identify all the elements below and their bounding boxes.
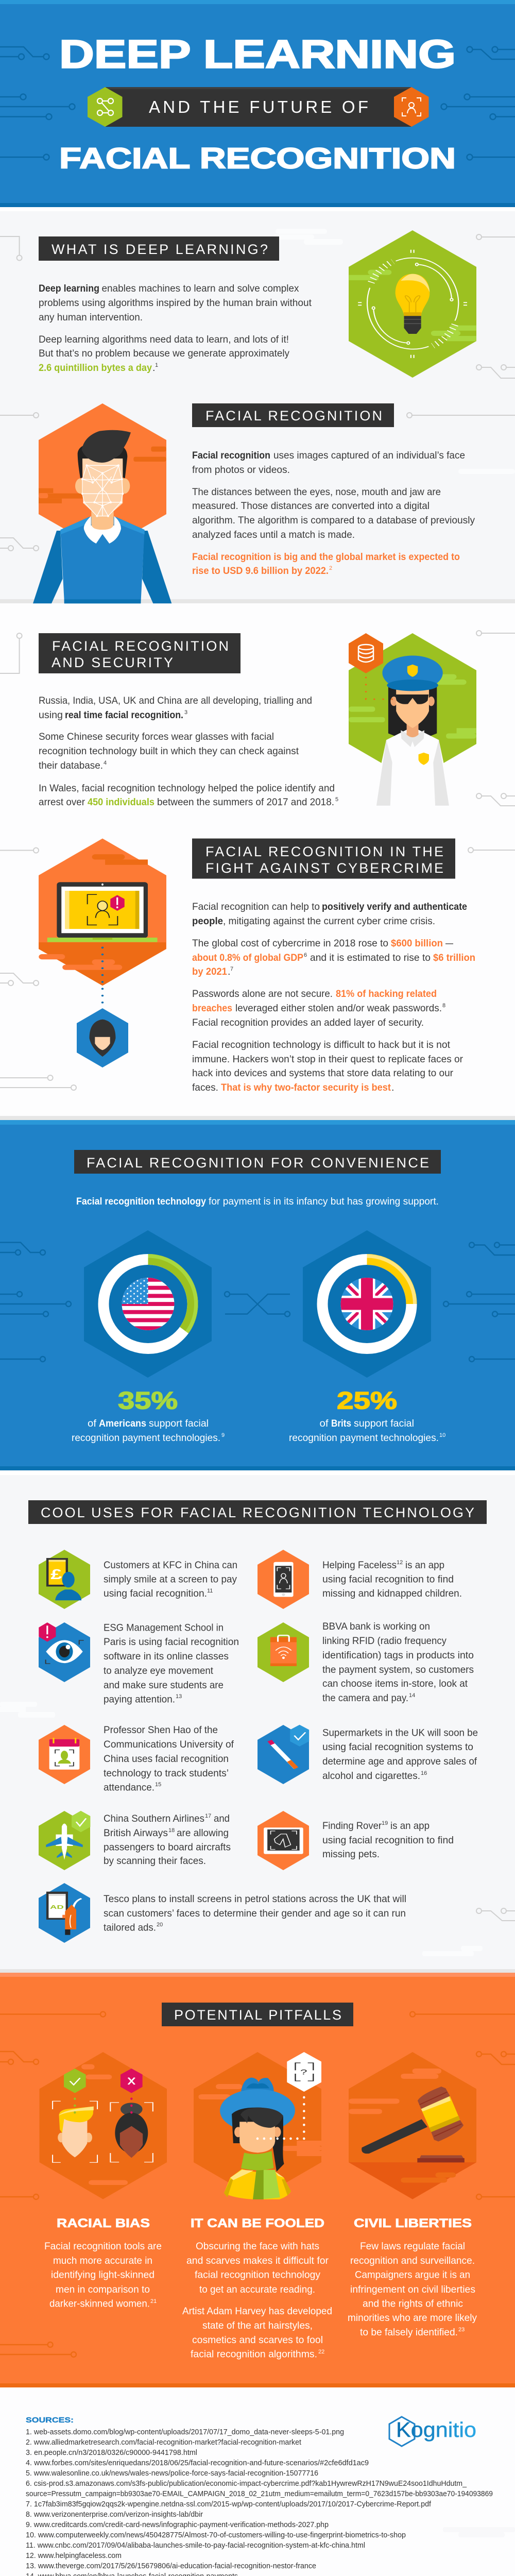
text block: security: arrest over	[39, 796, 85, 808]
sources list: 3. en.people.cn/n3/2018/0326/c90000-9441798.html	[26, 2449, 197, 2457]
text block: cybercrime: leveraged either stolen and/or weak passwords.	[235, 1003, 442, 1014]
sources list: 13. www.theverge.com/2017/5/26/15679806/ai-education-facial-recognition-nestor-france	[26, 2562, 316, 2570]
column: racial bias: much more accurate in	[53, 2255, 152, 2266]
section heading: convenience: FACIAL RECOGNITION FOR CONVENIENCE	[87, 1155, 429, 1171]
stat: 25%: 25%	[337, 1386, 397, 1414]
use: Professor Shen Hao	[39, 1724, 234, 1793]
column: racial bias: identifying light-skinned	[51, 2269, 154, 2281]
use: Supermarkets: using facial recognition systems to	[322, 1741, 473, 1753]
section heading: Facial recognition and security	[39, 633, 241, 673]
text block: what is deep learning: problems using algorithms inspired by the human brain without	[39, 297, 312, 309]
use: Finding Rover	[258, 1811, 454, 1870]
stat: 35%: Americans	[99, 1418, 146, 1429]
use: Airlines: are allowing	[177, 1827, 229, 1839]
use: Airlines: passengers to board aircrafts	[104, 1841, 231, 1853]
sources heading: SOURCES:	[26, 2416, 74, 2425]
text block: facial recognition: measured. Those distances are converted into a digital	[192, 500, 430, 512]
text block: cybercrime: The global cost of cybercrime in 2018 rose to	[192, 938, 388, 949]
intro text: for payment is in its infancy but has growing support.	[209, 1196, 439, 1207]
column: civil liberties: 23	[458, 2327, 465, 2333]
text block: facial recognition: algorithm. The algorithm is compared to a database of previously	[192, 515, 475, 526]
use: BBVA	[258, 1621, 474, 1704]
use: Professor Shen Hao: Communications University of	[104, 1739, 234, 1750]
text block: cybercrime: about 0.8% of global GDP	[192, 952, 303, 963]
column: civil liberties: infringement on civil liberties	[350, 2284, 475, 2295]
text block: cybercrime: by 2021	[192, 966, 227, 977]
sources list: 7. 1c7fab3im83f5gqiow2qqs2k-wpengine.netdna-ssl.com/2015-wp/wp-content/uploads/2017/10/2017-Cybercrime-Report.pdf	[26, 2500, 432, 2509]
stat: 25%: Brits	[331, 1418, 351, 1429]
text block: security	[39, 695, 338, 808]
panel: potential pitfalls	[0, 1969, 515, 2576]
icon: cross hexagon	[121, 2069, 143, 2093]
section heading: Facial recognition	[192, 403, 394, 427]
section heading: cybercrime	[192, 839, 455, 879]
text block: security: between the summers of 2017 and 2018.	[157, 796, 334, 808]
sources list: 2. www.alliedmarketresearch.com/facial-recognition-market?facial-recognition-market	[26, 2438, 301, 2447]
section 2 background	[0, 599, 515, 1116]
text block: cybercrime: —	[445, 938, 453, 949]
illustration: police officer with database	[349, 633, 476, 806]
section heading: cool uses	[28, 1500, 487, 1524]
sources list: 12. www.helpingfaceless.com	[26, 2552, 122, 2560]
use: Airlines: and	[214, 1813, 230, 1824]
text block: cybercrime: and it is estimated to rise to	[310, 952, 431, 963]
column: civil liberties: Campaigners argue it is an	[355, 2269, 470, 2281]
stat: 35%: support facial	[149, 1418, 209, 1429]
use: Supermarkets	[258, 1725, 478, 1784]
column: civil liberties: to be falsely identified.	[360, 2327, 458, 2338]
use: BBVA: identification) tags in products into	[322, 1650, 474, 1661]
text block: cybercrime: $600 billion	[391, 938, 443, 949]
illustration: racial bias	[39, 2052, 167, 2199]
use: Professor Shen Hao: China uses facial recognition	[104, 1753, 229, 1765]
use: Finding Rover: using facial recognition to find	[322, 1835, 454, 1846]
use: ESG school: paying attention.	[104, 1694, 175, 1705]
icon: alert hexagon	[110, 895, 125, 911]
title line: Deep Learning: DEEP LEARNING	[59, 32, 456, 76]
illustration: man with face mesh	[33, 403, 171, 603]
use: Tesco: 20	[157, 1922, 163, 1928]
text block: cybercrime: 7	[230, 966, 233, 972]
column: it can be fooled: facial recognition technology	[195, 2269, 320, 2281]
panel: sources	[26, 2416, 493, 2576]
use: ESG school: Paris is using facial recognition	[104, 1636, 239, 1648]
panel: convenience	[0, 1116, 515, 1475]
sources list: 8. www.verizonenterprise.com/verizon-insights-lab/dbir	[26, 2511, 203, 2519]
sources list: 4. www.forbes.com/sites/enriquedans/2018/06/25/facial-recognition-and-future-scenarios/#2cfe6dfd1ac9	[26, 2459, 369, 2467]
stat: 25%: of	[319, 1418, 329, 1429]
illustration: light bulb in green hexagon	[349, 230, 476, 378]
use: BBVA: the payment system, so customers	[322, 1664, 474, 1675]
use: Tesco: Tesco plans to install screens in petrol stations across the UK that will	[104, 1893, 406, 1905]
text block: facial recognition: Facial recognition is big and the global market is expected to	[192, 551, 460, 563]
use: Helping Faceless	[258, 1550, 462, 1609]
use: Professor Shen Hao: attendance.	[104, 1782, 154, 1793]
use: Helping Faceless: using facial recognition to find	[322, 1573, 454, 1585]
column: it can be fooled: to get an accurate reading.	[199, 2284, 315, 2295]
use: Supermarkets: alcohol and cigarettes.	[322, 1770, 420, 1782]
use: Finding Rover: 19	[382, 1820, 388, 1826]
text block: security: using	[39, 709, 63, 721]
use: Finding Rover: is an app	[390, 1820, 430, 1832]
column: it can be fooled	[182, 2216, 332, 2360]
chart: USA donut 35%	[84, 1230, 212, 1378]
text block: what is deep learning: 1	[155, 362, 158, 368]
sources list: 1. web-assets.domo.com/blog/wp-content/uploads/2017/07/17_domo_data-never-sleeps-5-01.png	[26, 2428, 344, 2436]
icon: orange hexagon with face scan	[394, 87, 428, 127]
logo: Kognitio: Kognitio	[396, 2418, 476, 2442]
use: BBVA: can choose items in-store, look at	[322, 1678, 468, 1689]
section heading: potential pitfalls: POTENTIAL PITFALLS	[174, 2007, 341, 2023]
column: it can be fooled: state of the art hairstyles,	[202, 2320, 313, 2331]
column: it can be fooled: IT CAN BE FOOLED	[191, 2216, 324, 2230]
section heading: convenience	[74, 1150, 441, 1174]
icon: US flag	[122, 1278, 175, 1330]
section heading: cool uses: COOL USES FOR FACIAL RECOGNITION TECHNOLOGY	[41, 1505, 474, 1520]
use: Tesco: scan customers’ faces to determine their gender and age so it can run	[104, 1908, 406, 1919]
text block: cybercrime	[192, 901, 475, 1093]
text block: facial recognition: 2	[329, 565, 332, 571]
icon: question hexagon: ?	[300, 2068, 307, 2076]
text block: cybercrime: Facial recognition can help to	[192, 901, 320, 912]
banner: and the future of: AND THE FUTURE OF	[149, 97, 368, 116]
use: Supermarkets: determine age and approve sales of	[322, 1756, 477, 1767]
column: it can be fooled: and scarves makes it difficult for	[186, 2255, 329, 2266]
use: Tesco	[39, 1883, 406, 1943]
column: racial bias: darker-skinned women.	[49, 2298, 150, 2310]
text block: facial recognition	[192, 450, 475, 577]
text block: security: Some Chinese security forces wear glasses with facial	[39, 731, 274, 742]
text block: cybercrime: hack into devices and systems that store data relating to our	[192, 1067, 453, 1079]
stat: 35%: of	[88, 1418, 97, 1429]
use: ESG school: ESG Management School in	[104, 1622, 224, 1634]
column: civil liberties: Few laws regulate facial	[360, 2241, 465, 2252]
use: BBVA: the camera and pay.	[322, 1692, 408, 1704]
use: KFC: 11	[207, 1588, 213, 1594]
section heading: cybercrime: FIGHT AGAINST CYBERCRIME	[205, 860, 443, 876]
text block: facial recognition: analyzed faces until a match is made.	[192, 529, 355, 540]
use: ESG school: and make sure students are	[104, 1680, 224, 1691]
text block: security: 3	[184, 709, 187, 716]
intro text: Facial recognition technology	[76, 1196, 206, 1207]
use: KFC: simply smile at a screen to pay	[104, 1573, 237, 1585]
column: civil liberties: recognition and surveillance.	[350, 2255, 475, 2266]
text block: what is deep learning: .	[152, 362, 155, 374]
stat: 25%: support facial	[354, 1418, 414, 1429]
text block: what is deep learning: enables machines to learn and solve complex	[102, 283, 299, 294]
use: Airlines	[39, 1811, 231, 1870]
use: KFC: £	[50, 1567, 62, 1583]
stat: 25%: recognition payment technologies.	[289, 1432, 439, 1444]
column: it can be fooled: Artist Adam Harvey has developed	[182, 2306, 332, 2317]
section heading: cybercrime: FACIAL RECOGNITION IN THE	[205, 844, 443, 859]
stat: 35%: recognition payment technologies.	[72, 1432, 220, 1444]
text block: security: In Wales, facial recognition technology helped the police identify and	[39, 783, 335, 794]
icon: UK flag	[340, 1278, 394, 1330]
text block: security: recognition technology built in which they can check against	[39, 745, 299, 757]
section heading: Facial recognition: FACIAL RECOGNITION	[205, 408, 382, 423]
text block: security: 5	[335, 796, 338, 803]
use: Airlines: 18	[168, 1827, 175, 1834]
text block: cybercrime: $6 trillion	[433, 952, 475, 963]
text block: what is deep learning: But that’s no problem because we generate approximately	[39, 348, 289, 359]
use: Professor Shen Hao: Professor Shen Hao of the	[104, 1724, 218, 1736]
column: it can be fooled: 22	[318, 2349, 324, 2355]
text block: cybercrime: That is why two-factor security is best	[221, 1082, 391, 1093]
text block: cybercrime: 8	[442, 1003, 445, 1009]
use: Supermarkets: Supermarkets in the UK will soon be	[322, 1727, 478, 1739]
stat: 25%	[289, 1386, 445, 1444]
text block: cybercrime: positively verify and authenticate	[322, 901, 467, 912]
title line: Facial Recognition: FACIAL RECOGNITION	[59, 142, 456, 175]
text block: cybercrime: .	[228, 966, 230, 977]
use: ESG school	[39, 1622, 239, 1705]
column: racial bias	[44, 2216, 162, 2310]
column: racial bias: RACIAL BIAS	[57, 2216, 150, 2230]
use: Professor Shen Hao: technology to track students’	[104, 1768, 229, 1779]
decorative circuits light sections	[0, 234, 515, 551]
use: Finding Rover: Finding Rover	[322, 1820, 382, 1832]
column: racial bias: Facial recognition tools are	[44, 2241, 162, 2252]
text block: what is deep learning: Deep learning	[39, 283, 99, 294]
use: Helping Faceless: is an app	[405, 1560, 444, 1571]
stat: 35%	[72, 1386, 225, 1444]
illustration: laptop alert and hacker	[39, 839, 166, 1067]
text block: what is deep learning: any human intervention.	[39, 312, 143, 323]
text block: what is deep learning: 2.6 quintillion bytes a day	[39, 362, 152, 374]
sources list: source=Pressutm_campaign=bb9303ae70-EMAIL_CAMPAIGN_2018_02_21utm_medium=emailutm_term=0_7623d157be-bb9303ae70-194093869	[26, 2490, 493, 2498]
stat: 25%: 10	[439, 1432, 445, 1438]
text block: what is deep learning: Deep learning algorithms need data to learn, and lots of it!	[39, 334, 289, 345]
text block: security: 450 individuals	[88, 796, 154, 808]
text block: cybercrime: Facial recognition provides an added layer of security.	[192, 1017, 424, 1028]
intro text	[76, 1196, 439, 1207]
use: Airlines: by scanning their faces.	[104, 1855, 206, 1867]
stat: 35%: 9	[221, 1432, 225, 1438]
column: it can be fooled: Obscuring the face with hats	[196, 2241, 319, 2252]
column: civil liberties: CIVIL LIBERTIES	[354, 2216, 472, 2230]
text block: facial recognition: rise to USD 9.6 billion by 2022.	[192, 565, 329, 577]
illustration: gavel	[349, 2052, 476, 2199]
sources list: 5. www.walesonline.co.uk/news/wales-news/police-force-says-facial-recognition-15077716	[26, 2469, 318, 2478]
section heading: potential pitfalls	[162, 2003, 353, 2026]
text block: facial recognition: The distances between the eyes, nose, mouth and jaw are	[192, 486, 441, 498]
use: Supermarkets: 16	[421, 1770, 427, 1776]
sources list: 11. www.cnbc.com/2017/09/04/alibaba-launches-smile-to-pay-facial-recognition-system-at-kfc-china.html	[26, 2541, 365, 2550]
illustration: it can be fooled	[194, 2052, 322, 2199]
use: Tesco: AD	[50, 1904, 64, 1910]
icon: check hexagon	[64, 2069, 86, 2093]
use: KFC: using facial recognition.	[104, 1588, 207, 1599]
sources list: 6. csis-prod.s3.amazonaws.com/s3fs-public/publication/economic-impact-cybercrime.pdf?kab1HywrewRzH17N9wuE24soo1IdhuHdutm_	[26, 2480, 467, 2488]
sources list: 10. www.computerweekly.com/news/450428775/Almost-70-of-customers-willing-to-use-fingerprint-biometrics-to-shop	[26, 2531, 406, 2539]
column: civil liberties: minorities who are more likely	[348, 2312, 477, 2324]
use: Helping Faceless: missing and kidnapped children.	[322, 1588, 462, 1599]
text block: cybercrime: 6	[304, 952, 307, 958]
text block: security: 4	[104, 760, 107, 766]
chart: UK donut 25%	[303, 1230, 431, 1378]
use: Helping Faceless: 12	[397, 1560, 403, 1566]
section heading: What is deep learning: WHAT IS DEEP LEARNING?	[52, 242, 268, 257]
text block: facial recognition: Facial recognition	[192, 450, 270, 461]
stat: 35%: 35%	[118, 1386, 178, 1414]
text block: cybercrime: faces.	[192, 1082, 218, 1093]
column: civil liberties	[348, 2216, 477, 2338]
sources list: 9. www.creditcards.com/credit-card-news/infographic-payment-verification-methods-2027.php	[26, 2521, 329, 2529]
use: KFC: Customers at KFC in China can	[104, 1560, 237, 1571]
text block: security: real time facial recognition.	[65, 709, 183, 721]
text block: cybercrime: immune. Hackers won’t stop in their quest to replicate faces or	[192, 1054, 463, 1065]
text block: cybercrime: Passwords alone are not secure.	[192, 988, 333, 999]
use: Airlines: British Airways	[104, 1827, 168, 1839]
section heading: What is deep learning	[39, 236, 279, 261]
column: it can be fooled: facial recognition algorithms.	[191, 2348, 317, 2360]
icon: database hexagon	[349, 633, 383, 673]
text block: facial recognition: from photos or videos.	[192, 464, 290, 476]
column: racial bias: men in comparison to	[56, 2284, 150, 2295]
text block: what is deep learning	[39, 283, 312, 374]
sources list	[26, 2428, 493, 2576]
column: racial bias: 21	[150, 2298, 157, 2304]
use: Airlines: 17	[205, 1813, 211, 1819]
section heading: Facial recognition and security: FACIAL RECOGNITION	[52, 638, 229, 654]
face mesh	[82, 465, 123, 516]
text block: facial recognition: uses images captured of an individual’s face	[273, 450, 465, 461]
text block: cybercrime: breaches	[192, 1003, 232, 1014]
column: civil liberties: and the rights of ethnic	[363, 2298, 463, 2310]
use: Finding Rover: missing pets.	[322, 1849, 380, 1860]
icon: question hexagon	[287, 2052, 321, 2092]
use: Helping Faceless: Helping Faceless	[322, 1560, 397, 1571]
use: BBVA: BBVA bank is working on	[322, 1621, 430, 1632]
text block: cybercrime: Facial recognition technology is difficult to hack but it is not	[192, 1039, 451, 1050]
use: ESG school: software in its online classes	[104, 1651, 229, 1662]
use: Professor Shen Hao: 15	[155, 1782, 161, 1788]
banner: and the future of	[88, 87, 428, 127]
text block: cybercrime: people	[192, 916, 223, 927]
text block: cybercrime: , mitigating against the current cyber crime crisis.	[223, 916, 435, 927]
text block: cybercrime: .	[391, 1082, 394, 1093]
icon: green hexagon with network	[88, 87, 123, 127]
use: Tesco: tailored ads.	[104, 1922, 156, 1934]
text block: security: their database.	[39, 760, 103, 771]
icon: hacker hexagon	[77, 1008, 128, 1067]
use: BBVA: linking RFID (radio frequency	[322, 1635, 447, 1647]
use: Airlines: China Southern Airlines	[104, 1813, 204, 1824]
use: KFC	[39, 1550, 237, 1609]
section heading: Facial recognition and security: AND SECURITY	[52, 655, 173, 670]
use: ESG school: to analyze eye movement	[104, 1665, 214, 1676]
column: it can be fooled: cosmetics and scarves to fool	[192, 2334, 323, 2346]
use: ESG school: 13	[176, 1693, 182, 1700]
use: BBVA: 14	[409, 1692, 415, 1699]
text block: security: Russia, India, USA, UK and China are all developing, trialling and	[39, 695, 312, 706]
text block: cybercrime: 81% of hacking related	[336, 988, 437, 999]
header panel	[0, 0, 515, 211]
